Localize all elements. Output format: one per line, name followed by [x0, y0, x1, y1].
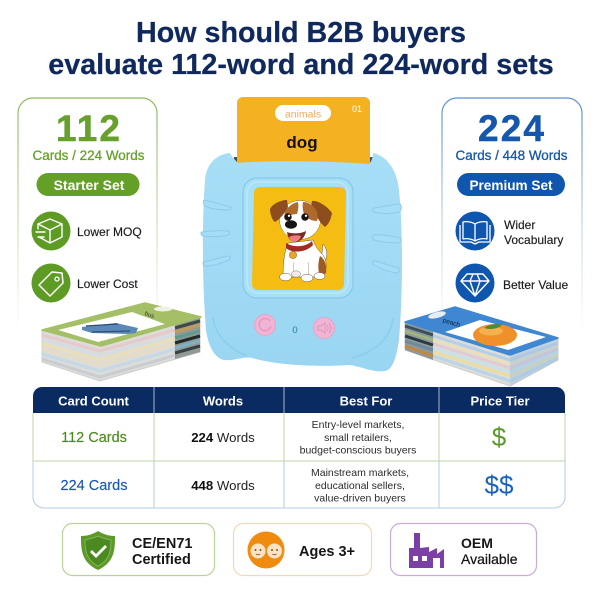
row: 224 cards: Mainstream markets,	[311, 467, 409, 479]
product: flashcard reader device	[201, 97, 402, 371]
tail	[320, 244, 327, 262]
row: 112 cards: $	[492, 422, 507, 452]
row: 112 cards: 224 Words	[191, 430, 255, 445]
table header: Card Count	[58, 394, 130, 408]
OEM text: OEM	[461, 535, 493, 551]
row: 224 cards: educational sellers,	[315, 480, 405, 492]
bus picture	[82, 323, 138, 334]
panel: 224 premium set	[442, 98, 582, 330]
ears	[270, 200, 288, 222]
icon: price tag	[32, 264, 70, 302]
flashcard: animals	[285, 108, 321, 120]
side grips	[201, 200, 401, 273]
row: 224 cards: 448 Words	[191, 478, 255, 493]
row: 224 cards: 224 Cards	[61, 478, 127, 494]
starter set pill: Starter Set	[54, 177, 125, 193]
icon: dog illustration	[270, 200, 332, 282]
right card stack: peach	[442, 317, 461, 329]
112 figure: 112	[56, 108, 120, 149]
orange picture	[473, 324, 517, 346]
certification text: CE/EN71	[132, 536, 192, 552]
title: How should B2B buyers	[136, 17, 466, 49]
panel: 112 starter set	[18, 98, 157, 330]
eye patches	[284, 202, 298, 220]
left card stack: bus	[144, 311, 155, 320]
badge: ages 3+	[234, 524, 372, 576]
device body	[203, 153, 402, 371]
icon: factory	[409, 533, 444, 568]
OEM text: Available	[461, 551, 518, 567]
icon: open book	[456, 212, 494, 250]
premium set pill	[457, 173, 565, 196]
row: 112 cards: budget-conscious buyers	[300, 444, 416, 456]
row: 112 cards: 112 Cards	[61, 430, 127, 446]
row: 224 cards: value-driven buyers	[314, 492, 406, 504]
collar and tag	[286, 241, 313, 252]
flashcard: 01	[352, 104, 362, 114]
title	[48, 17, 554, 81]
flashcard: dog	[286, 133, 318, 152]
table header: Words	[203, 394, 243, 408]
table header: Best For	[340, 394, 392, 408]
badge: CE/EN71 certified	[62, 524, 214, 576]
icon: diamond	[456, 264, 494, 302]
flashcard	[234, 97, 373, 168]
premium set pill: Premium Set	[469, 178, 553, 193]
table header: Price Tier	[470, 394, 530, 408]
badge: OEM available	[390, 524, 536, 576]
icon: shield	[81, 531, 115, 570]
buttons	[254, 314, 334, 338]
eyes and nose	[284, 213, 292, 221]
lower MOQ label: Lower MOQ	[77, 225, 142, 239]
cards and words subheading: Cards / 224 Words	[32, 148, 145, 163]
icon: box	[32, 212, 70, 250]
row: 224 cards: $$	[485, 470, 514, 500]
icon: children faces	[248, 532, 284, 568]
screen with dog	[252, 187, 346, 290]
left card stack	[42, 303, 201, 381]
row: 112 cards: small retailers,	[324, 432, 392, 444]
screen frame	[243, 178, 353, 298]
body	[283, 240, 326, 277]
wider vocabulary label: Vocabulary	[504, 233, 563, 247]
head	[280, 200, 320, 240]
certification text: Certified	[132, 552, 191, 568]
table header	[33, 387, 565, 413]
ages text: Ages 3+	[299, 544, 355, 560]
cards and words subheading: Cards / 448 Words	[456, 148, 568, 163]
starter set pill	[36, 173, 140, 196]
right card stack	[405, 307, 558, 386]
title: evaluate 112-word and 224-word sets	[48, 49, 554, 81]
224 figure: 224	[478, 108, 544, 149]
row: 112 cards	[61, 419, 507, 456]
comparison table	[33, 387, 565, 508]
wider vocabulary label: Wider	[504, 218, 535, 232]
lower cost label: Lower Cost	[77, 277, 138, 291]
better value label: Better Value	[503, 278, 568, 292]
mouth	[287, 231, 306, 242]
row: 112 cards: Entry-level markets,	[312, 419, 404, 431]
row: 224 cards	[61, 467, 514, 504]
buttons: 0	[292, 325, 298, 336]
